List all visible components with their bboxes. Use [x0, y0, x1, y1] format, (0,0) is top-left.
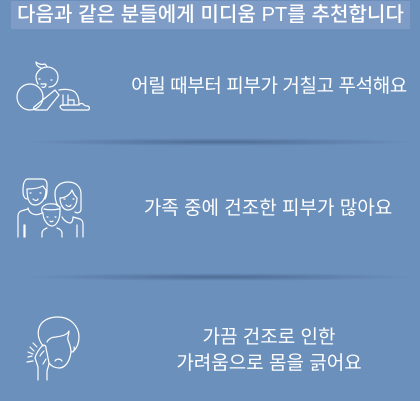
text: row 3: 가끔 건조로 인한 [203, 327, 335, 348]
title banner [11, 1, 410, 29]
divider [20, 273, 420, 281]
title text: 다음과 같은 분들에게 미디움 PT를 추천합니다 [17, 4, 404, 26]
text: row 3 [176, 327, 362, 374]
divider [20, 138, 420, 146]
text: row 2: 가족 중에 건조한 피부가 많아요 [144, 198, 392, 219]
text: row 3: 가려움으로 몸을 긁어요 [176, 353, 362, 374]
icon: family [17, 178, 84, 238]
icon: itchy face [26, 316, 80, 381]
icon: baby with ball [16, 61, 90, 111]
text: row 1: 어릴 때부터 피부가 거칠고 푸석해요 [131, 76, 407, 97]
